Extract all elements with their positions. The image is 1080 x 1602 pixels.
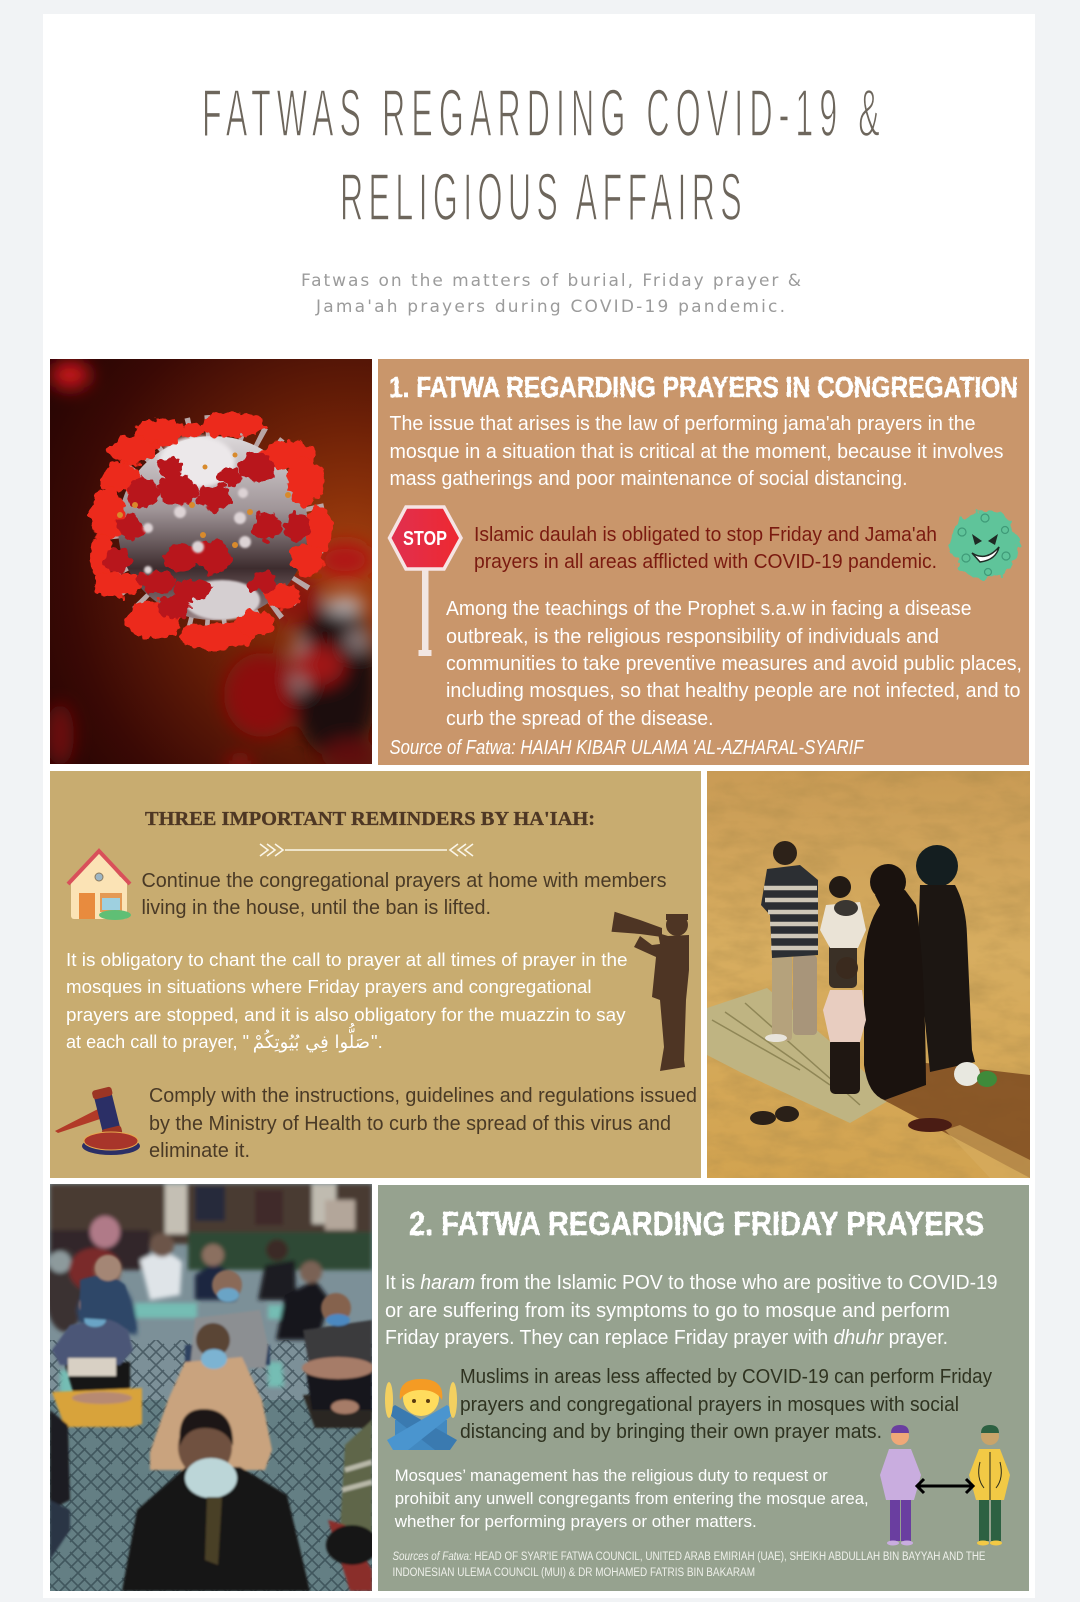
text block: comply with regulations xyxy=(149,1085,697,1162)
text block: teachings of the Prophet xyxy=(446,598,1022,730)
icon: green virus with angry face xyxy=(951,511,1019,579)
text block: less affected areas: Muslims in areas less affected by COVID-19 can perform Friday xyxy=(460,1366,992,1388)
text block: less affected areas: distancing and by bringing their own prayer mats. xyxy=(460,1421,882,1443)
worshipper in yellow xyxy=(969,1425,1010,1546)
text block: mosque management: whether for performing prayers or other matters. xyxy=(394,1512,757,1531)
girl xyxy=(823,957,866,1094)
subtitle: Fatwas on the matters of burial, Friday prayer & xyxy=(301,271,801,291)
front man in black xyxy=(122,1409,310,1591)
text block: issue xyxy=(390,413,1004,490)
source line: Source of Fatwa: HAIAH KIBAR ULAMA 'AL-AZHARAL-SYARIF xyxy=(390,737,865,759)
callout: obligation to stop prayers: prayers in all areas afflicted with COVID-19 pandemic. xyxy=(474,551,937,573)
arrow divider xyxy=(260,844,473,856)
text block: less affected areas: prayers and congregational prayers in mosques with social xyxy=(460,1394,959,1416)
icon: gavel xyxy=(55,1086,140,1155)
subtitle xyxy=(301,271,801,317)
text block: issue: mass gatherings and poor maintenance of social distancing. xyxy=(390,468,908,490)
photo: masked congregants in mosque xyxy=(45,1184,378,1591)
text block: continue congregational prayers at home: living in the house, until the ban is lifted. xyxy=(142,897,491,919)
text block: call to prayer: صَلُّوا فِي بُيُوتِكُمْ xyxy=(253,1023,370,1053)
panel: three important reminders xyxy=(50,771,701,1178)
man in beige robe xyxy=(150,1323,272,1470)
icon: muezzin silhouette with megaphone xyxy=(612,912,689,1071)
text block: comply with regulations: eliminate it. xyxy=(149,1140,250,1162)
shoes and bag xyxy=(750,1062,997,1132)
heading: section 2: 2. FATWA REGARDING FRIDAY PRAYERS xyxy=(409,1205,984,1242)
text block: mosque management xyxy=(394,1466,869,1531)
text block: call to prayer: ". xyxy=(371,1031,383,1052)
panel: fatwa regarding Friday prayers xyxy=(378,1185,1029,1591)
icon: stop sign xyxy=(390,507,461,656)
source line: Sources of Fatwa: HEAD OF SYAR'IE FATWA COUNCIL, UNITED ARAB EMIRIAH (UAE), SHEIKH ABDULLAH BIN BAYYAH AND THE xyxy=(392,1551,986,1563)
text block: teachings of the Prophet: outbreak, is the religious responsibility of individuals and xyxy=(446,626,939,648)
text block: call to prayer: It is obligatory to chant the call to prayer at all times of prayer in the xyxy=(66,949,628,970)
double-headed arrow xyxy=(917,1479,973,1493)
text block: less affected areas xyxy=(460,1366,992,1443)
text block: haram ruling: It is haram from the Islamic POV to those who are positive to COVID-19 xyxy=(385,1272,998,1294)
text block: continue congregational prayers at home xyxy=(142,870,666,919)
text block: continue congregational prayers at home: Continue the congregational prayers at home with members xyxy=(142,870,666,892)
title xyxy=(202,76,880,235)
callout: obligation to stop prayers xyxy=(474,524,937,573)
text block: mosque management: prohibit any unwell congregants from entering the mosque area, xyxy=(395,1489,869,1508)
worshipper in purple xyxy=(880,1425,921,1546)
seated man left xyxy=(52,1255,142,1427)
text block: mosque management: Mosques’ management has the religious duty to request or xyxy=(395,1466,828,1485)
title: FATWAS REGARDING COVID-19 & xyxy=(202,76,880,151)
icon: house xyxy=(68,851,131,920)
text block: call to prayer xyxy=(66,949,628,1053)
text block: haram ruling xyxy=(385,1272,998,1349)
photo: family praying in the desert xyxy=(707,771,1030,1178)
source line: INDONESIAN ULEMA COUNCIL (MUI) & DR MOHAMED FATRIS BIN BAKARAM xyxy=(392,1567,755,1579)
text block: issue: The issue that arises is the law of performing jama'ah prayers in the xyxy=(390,413,976,435)
text block: comply with regulations: Comply with the instructions, guidelines and regulations issued xyxy=(149,1085,697,1107)
side figures and red rug xyxy=(50,1410,378,1591)
source line xyxy=(392,1551,986,1579)
photo: coronavirus particle xyxy=(46,359,379,771)
text block: call to prayer: mosques in situations where Friday prayers and congregational xyxy=(66,976,592,997)
text block: teachings of the Prophet: including mosques, so that healthy people are not infected, and to xyxy=(446,680,1020,702)
seated man right xyxy=(302,1293,374,1428)
boy xyxy=(820,876,866,988)
text block: teachings of the Prophet: curb the spread of the disease. xyxy=(446,708,714,730)
text block: call to prayer: prayers are stopped, and it is also obligatory for the muazzin to say xyxy=(66,1004,626,1025)
text block: call to prayer: at each call to prayer, " xyxy=(66,1031,249,1052)
text block: teachings of the Prophet: communities to take preventive measures and avoid public places, xyxy=(446,653,1022,675)
subtitle: Jama'ah prayers during COVID-19 pandemic. xyxy=(315,297,785,317)
women in black xyxy=(864,845,975,1100)
title: RELIGIOUS AFFAIRS xyxy=(340,160,742,235)
icon: two worshippers keeping distance xyxy=(880,1425,1010,1546)
text block: comply with regulations: by the Ministry of Health to curb the spread of this virus and xyxy=(149,1113,671,1135)
heading: reminders: THREE IMPORTANT REMINDERS BY HA'IAH: xyxy=(145,808,595,830)
text block: haram ruling: Friday prayers. They can replace Friday prayer with dhuhr prayer. xyxy=(385,1327,948,1349)
text block: issue: mosque in a situation that is critical at the moment, because it involves xyxy=(390,441,1004,463)
icon: stop sign: STOP xyxy=(403,528,447,550)
text block: teachings of the Prophet: Among the teachings of the Prophet s.a.w in facing a disease xyxy=(446,598,972,620)
icon: person gesturing no xyxy=(385,1379,457,1450)
text block: haram ruling: or are suffering from its symptoms to go to mosque and perform xyxy=(385,1300,950,1322)
panel: fatwa regarding prayers in congregation xyxy=(378,359,1029,765)
seated man grey shirt xyxy=(185,1270,270,1368)
callout: obligation to stop prayers: Islamic daulah is obligated to stop Friday and Jama'ah xyxy=(474,524,937,546)
background people xyxy=(45,1186,355,1340)
man in striped shirt xyxy=(761,841,818,1042)
